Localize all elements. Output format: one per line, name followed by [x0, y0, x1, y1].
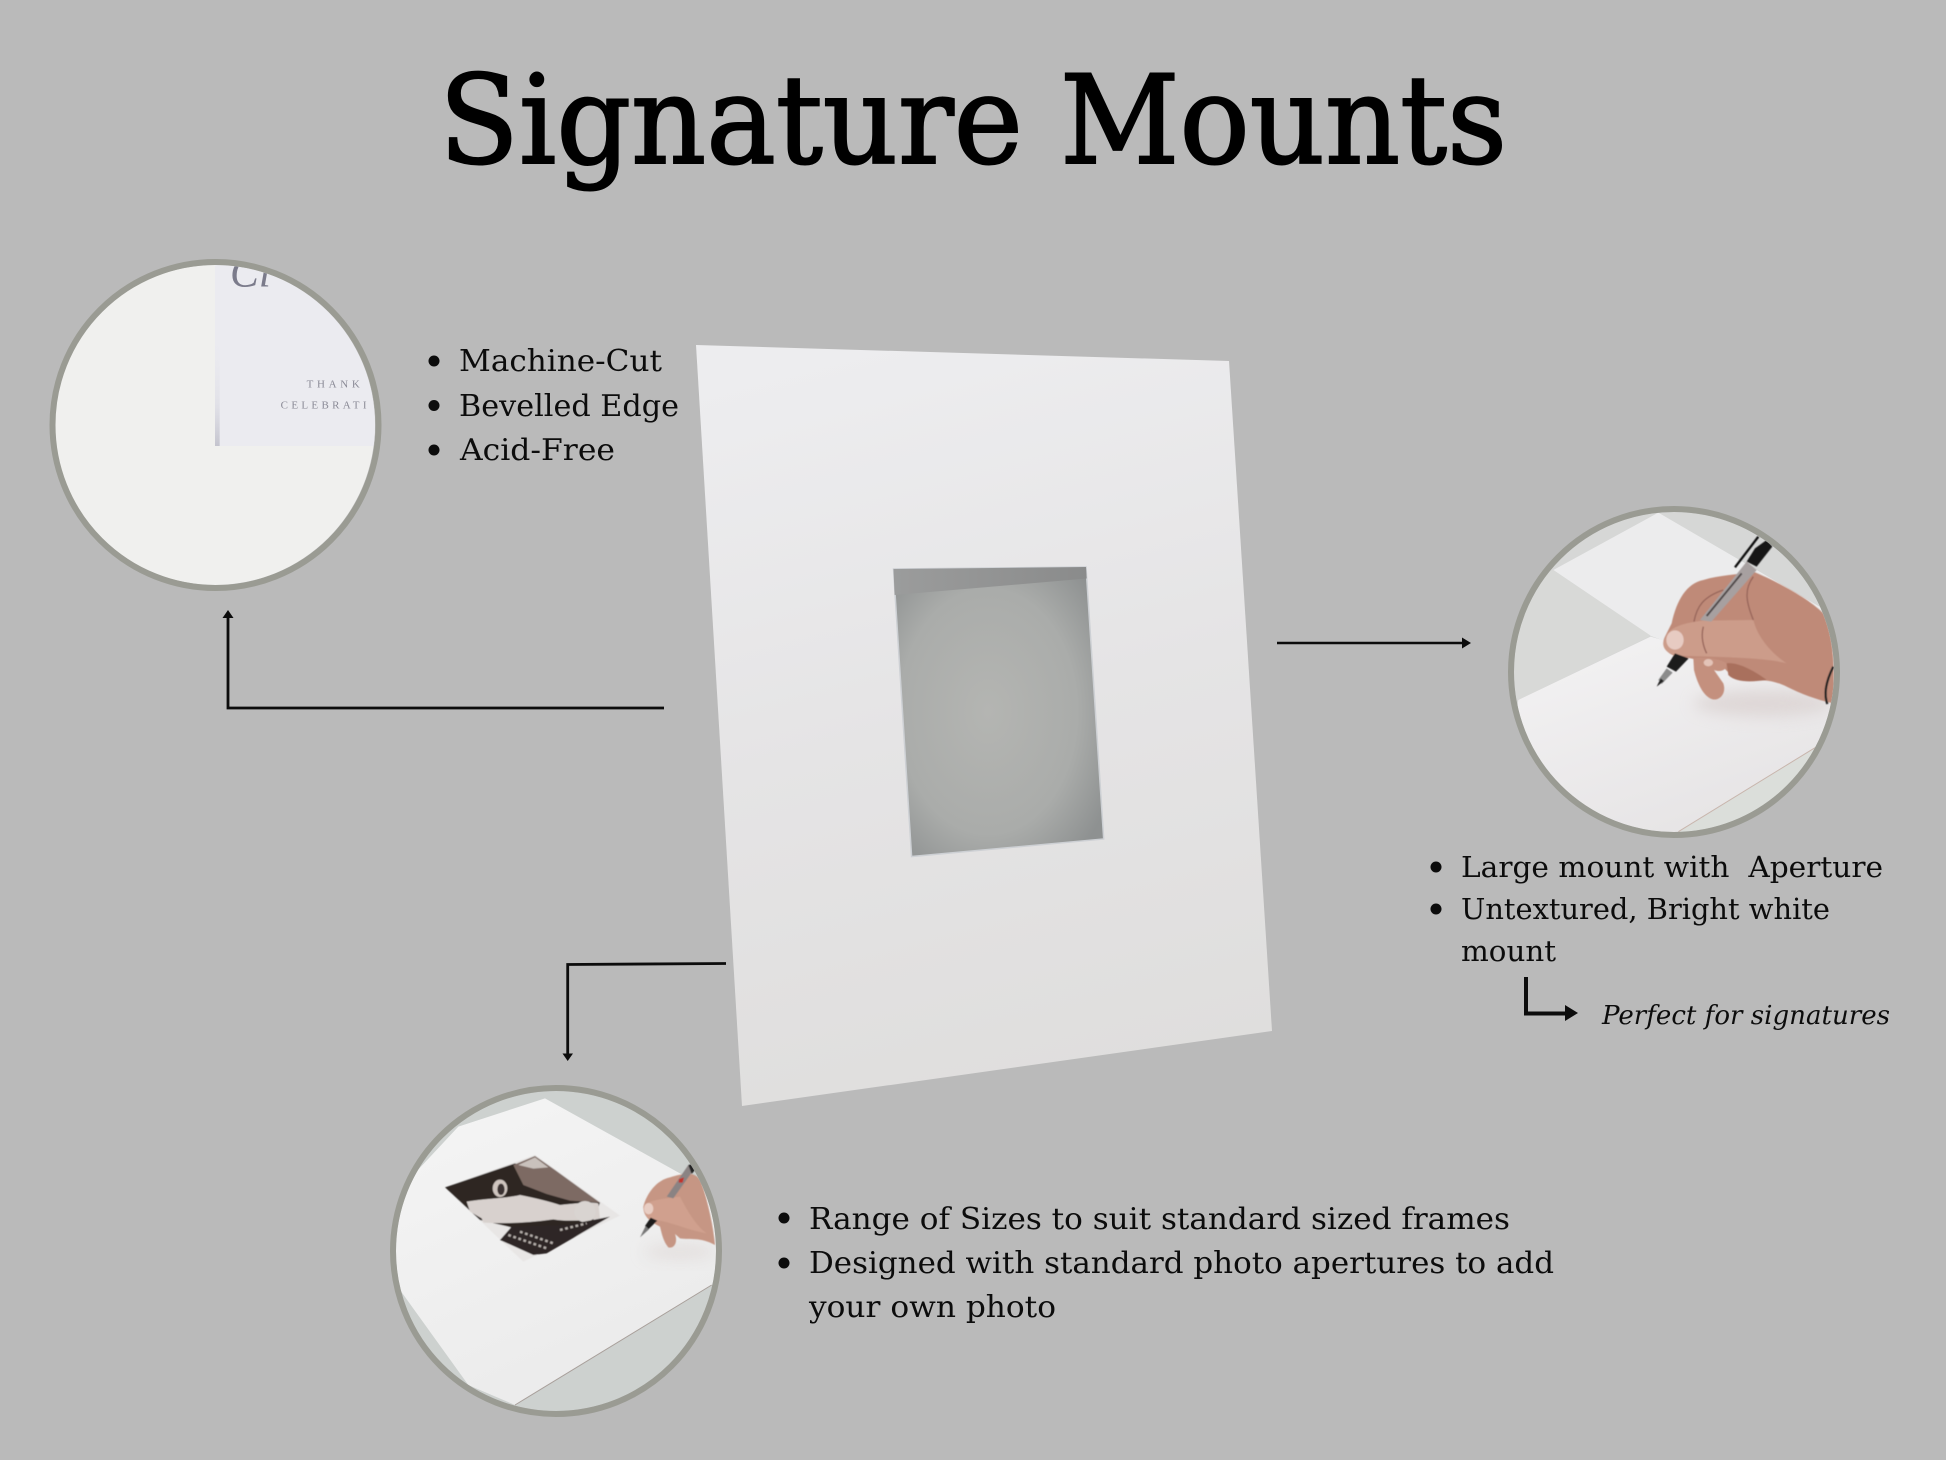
arrow: mount to sizes detail — [562, 964, 726, 1061]
circle: photo in mount detail — [387, 1088, 727, 1417]
circle photo: Cl — [230, 249, 271, 297]
bullet list: features: Acid-Free — [459, 433, 615, 468]
bullet list: sizes — [778, 1202, 1554, 1325]
circle photo — [387, 1090, 727, 1417]
circle photo — [1514, 512, 1834, 832]
bullet list: features: Bevelled Edge — [459, 389, 679, 424]
circle ring — [393, 1088, 719, 1414]
bullet list: mount properties: Untextured, Bright white — [1461, 892, 1830, 926]
arrow: to signatures note — [1526, 977, 1578, 1021]
circle photo: THANK — [307, 379, 363, 391]
bullet list: mount properties — [1430, 850, 1883, 968]
circle: bevelled corner detail — [50, 249, 383, 593]
aperture window — [894, 567, 1104, 856]
bullet list: mount properties: Large mount with Aperture — [1461, 850, 1883, 884]
photograph in aperture — [445, 1155, 620, 1262]
arrow: mount to signing detail — [1277, 638, 1471, 648]
bullet list: sizes: your own photo — [808, 1290, 1056, 1325]
bullet list: sizes: Designed with standard photo apertures to add — [809, 1246, 1554, 1281]
title: Signature Mounts — [439, 50, 1507, 193]
small hand with pen — [640, 1164, 715, 1248]
bullet list: mount properties: mount — [1461, 934, 1556, 968]
circle ring — [52, 262, 378, 588]
circle: hand signing mount — [1507, 507, 1847, 847]
bullet list: features: Machine-Cut — [459, 344, 662, 379]
circle ring — [1511, 509, 1837, 835]
circle photo: CELEBRATI — [281, 399, 370, 411]
note: perfect for signatures: Perfect for signatures — [1601, 1001, 1890, 1031]
central mount photo — [696, 345, 1272, 1106]
mount board — [696, 345, 1272, 1106]
bullet list: features — [428, 344, 679, 468]
bullet list: sizes: Range of Sizes to suit standard sized frames — [809, 1202, 1510, 1237]
arrow: mount to corner detail — [222, 610, 664, 708]
circle photo — [56, 265, 375, 585]
